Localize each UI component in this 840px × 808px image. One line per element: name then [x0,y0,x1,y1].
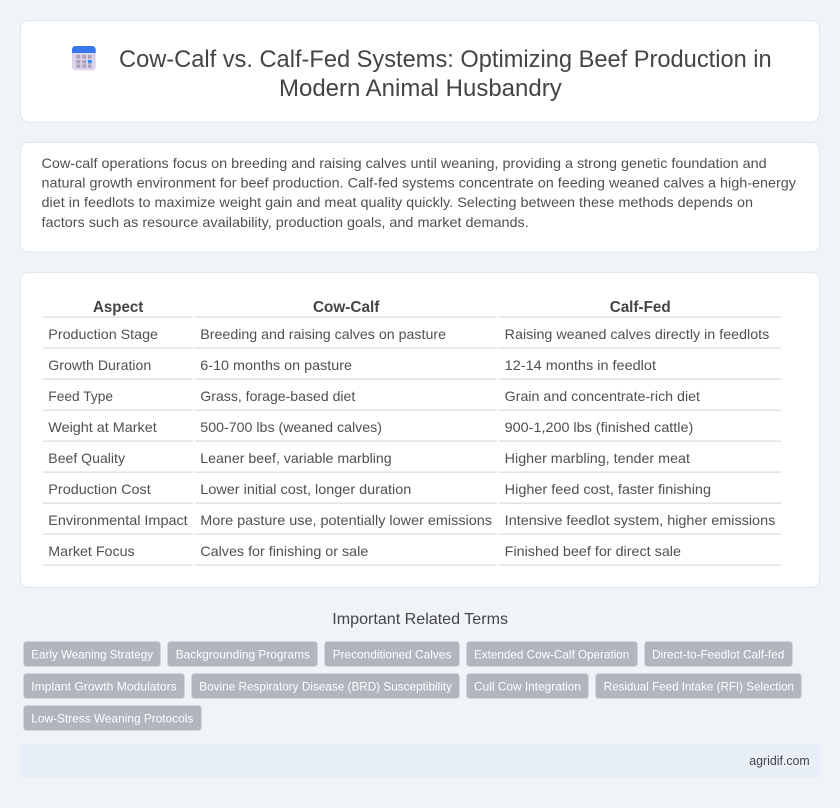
text block: introduction: diet in feedlots to maximize weight gain and meat quality quickly. Selecting between these methods depends on [42,194,753,210]
panel: comparison table [20,272,820,588]
row: production cost: Lower initial cost, longer duration [200,481,411,497]
title: Cow-Calf vs. Calf-Fed Systems: Optimizing Beef Production in [119,46,772,73]
tag [24,674,184,698]
row: production stage: Production Stage [48,326,158,342]
row: feed type: Grain and concentrate-rich diet [505,388,700,404]
row: beef quality: Leaner beef, variable marbling [200,450,392,466]
tag: Extended Cow-Calf Operation [474,647,629,661]
row: market focus: Market Focus [48,543,135,559]
row: weight at market: 500-700 lbs (weaned calves) [200,419,382,435]
icon: calendar [72,46,96,70]
tag: Direct-to-Feedlot Calf-fed [652,647,784,661]
row: weight at market: 900-1,200 lbs (finished cattle) [505,419,693,435]
panel: introduction [20,142,820,252]
footer [20,744,820,778]
row: feed type: Grass, forage-based diet [200,388,355,404]
row: weight at market: Weight at Market [48,419,157,435]
tag: Low-Stress Weaning Protocols [31,711,193,725]
row: production stage: Breeding and raising calves on pasture [200,326,446,342]
title: Modern Animal Husbandry [279,75,562,102]
tag: Cull Cow Integration [474,679,581,693]
row: production cost: Higher feed cost, faster finishing [505,481,711,497]
row: feed type [48,388,700,404]
row: market focus [48,543,681,559]
tag [324,642,460,666]
footer: agridif.com [749,753,810,768]
row: growth duration: Growth Duration [48,357,151,373]
row: environmental impact: More pasture use, potentially lower emissions [200,512,492,528]
heading: important related terms: Important Related Terms [332,611,508,628]
row: weight at market [48,419,693,435]
row: beef quality: Higher marbling, tender meat [505,450,690,466]
tag [192,674,460,698]
tag [466,642,638,666]
tag: Residual Feed Intake (RFI) Selection [604,679,794,693]
row: environmental impact: Environmental Impact [48,512,188,528]
tag: Early Weaning Strategy [31,647,153,661]
tag [24,642,160,666]
tag: Backgrounding Programs [176,647,310,661]
row: feed type: Feed Type [48,388,113,404]
row: market focus: Finished beef for direct sale [505,543,681,559]
row: production stage [48,326,769,342]
text block: introduction: factors such as resource availability, production goals, and market demands. [42,214,529,230]
panel: header [20,20,820,122]
tag [24,706,202,730]
row: growth duration [48,357,656,373]
row: production cost [48,481,711,497]
tag: Bovine Respiratory Disease (BRD) Susceptibility [199,679,452,693]
text block: introduction [42,155,796,230]
tag [168,642,318,666]
row: production cost: Production Cost [48,481,151,497]
row: environmental impact: Intensive feedlot system, higher emissions [505,512,775,528]
row: growth duration: 12-14 months in feedlot [505,357,656,373]
tag [596,674,802,698]
tag: Implant Growth Modulators [31,679,177,693]
table header: Calf-Fed [610,299,671,316]
row: market focus: Calves for finishing or sale [200,543,369,559]
table header [93,299,671,316]
panel: related term tags [24,642,802,730]
row: beef quality [48,450,690,466]
table header: Cow-Calf [313,299,380,316]
tag: Preconditioned Calves [333,647,451,661]
tag [644,642,792,666]
text block: introduction: natural growth environment for beef production. Calf-fed systems concentrate on feeding weaned calves a high-energy [42,175,796,191]
table header: Aspect [93,299,144,316]
tag [466,674,588,698]
row: production stage: Raising weaned calves directly in feedlots [505,326,769,342]
row: environmental impact [48,512,775,528]
title [119,46,772,102]
text block: introduction: Cow-calf operations focus on breeding and raising calves until weaning, providing a strong genetic foundation and [42,155,767,171]
row: growth duration: 6-10 months on pasture [200,357,352,373]
row: beef quality: Beef Quality [48,450,125,466]
